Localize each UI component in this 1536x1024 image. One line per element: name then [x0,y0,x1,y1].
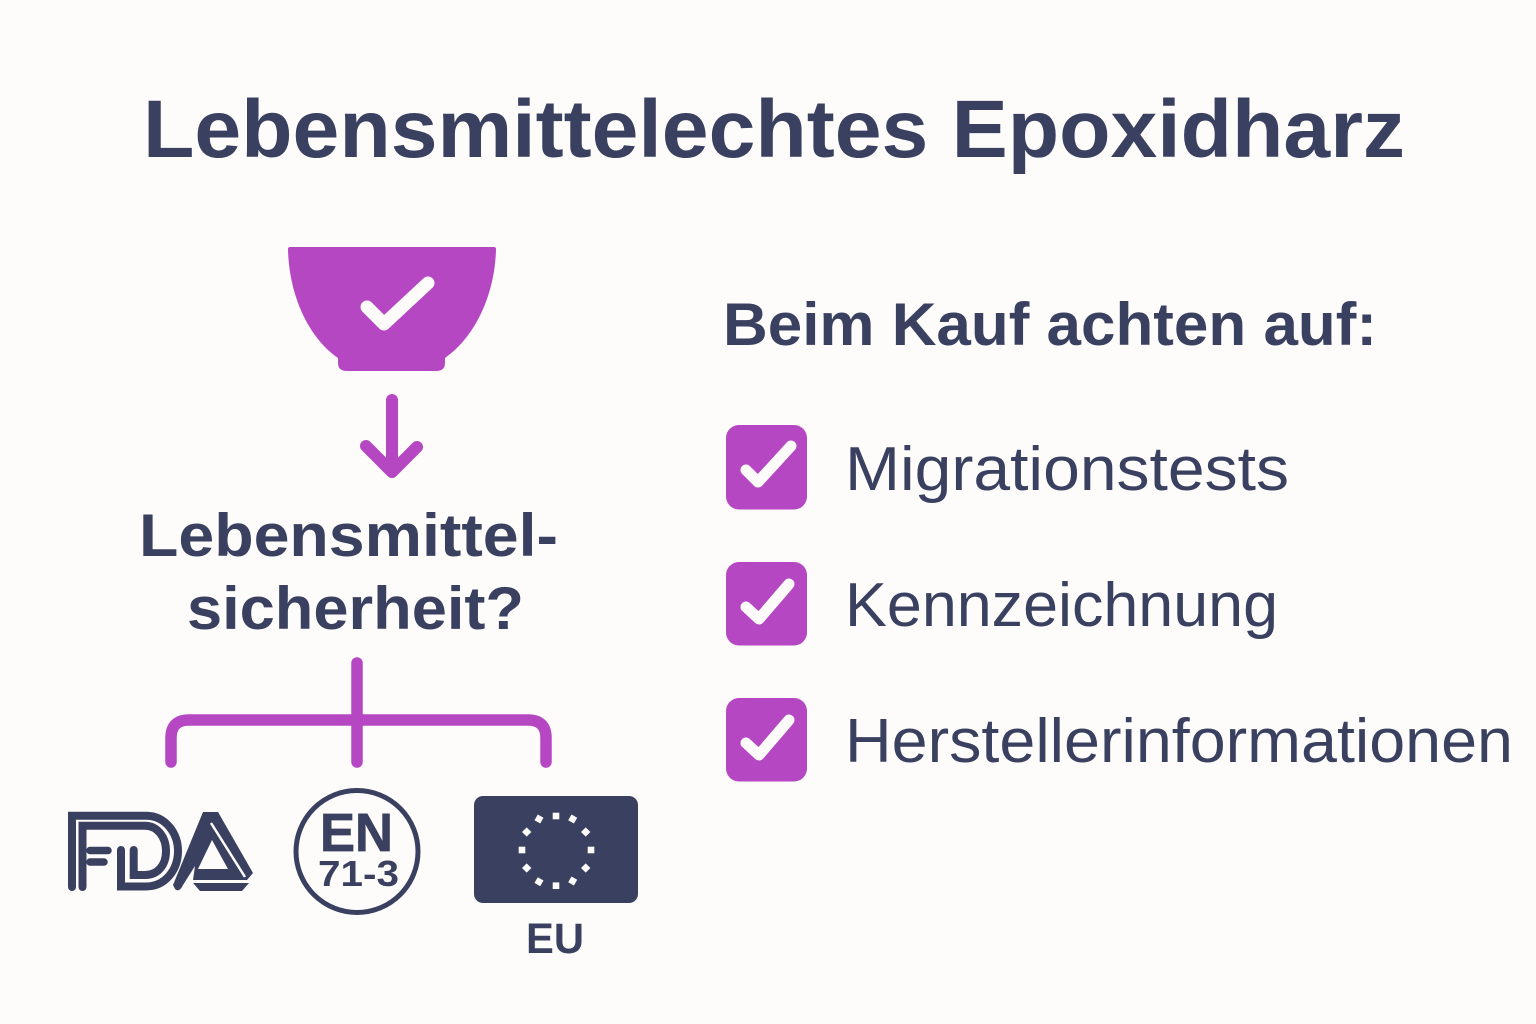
title: Lebensmittelechtes Epoxidharz [143,84,1405,175]
checklist item: Kennzeichnung [726,562,1278,646]
checklist item: Migrationstests [726,425,1289,510]
badge: EN 71-3: 71-3 [318,853,399,894]
badge: EN 71-3: EN [320,803,393,863]
heading: food safety question: Lebensmittel- [139,502,558,569]
checklist item: Herstellerinformationen: Herstellerinformationen [845,707,1513,776]
checklist item: Migrationstests: Migrationstests [845,435,1289,504]
icon: FDA logo [72,812,253,891]
icon: bowl with check [288,247,496,371]
arrow: bowl to question [366,400,417,472]
checklist item: Kennzeichnung: Kennzeichnung [845,571,1278,640]
heading: checklist: Beim Kauf achten auf: [723,291,1377,358]
label: EU: EU [526,915,584,963]
badge: EN 71-3 [296,790,418,912]
heading: food safety question [139,502,558,642]
heading: food safety question: sicherheit? [187,575,524,642]
branch connector [171,663,546,762]
checklist item: Herstellerinformationen [726,698,1513,782]
icon: EU flag [474,796,638,903]
